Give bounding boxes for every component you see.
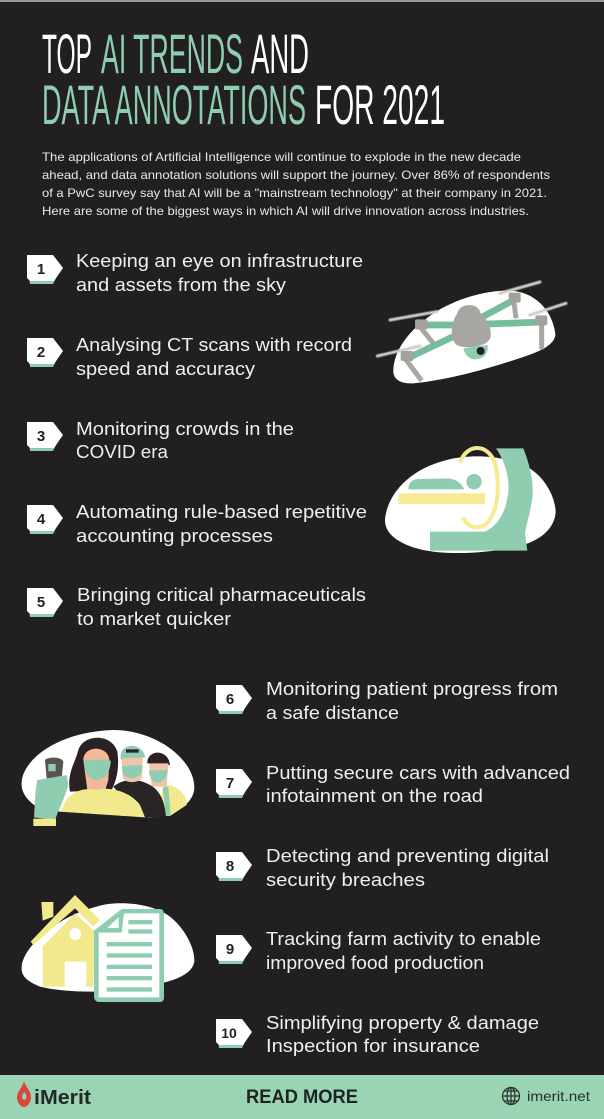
- item 10: 10: [221, 1025, 237, 1041]
- item 8: 8: [226, 858, 234, 875]
- item 6: Monitoring patient progress from: [266, 679, 558, 699]
- item 3: COVID era: [76, 442, 169, 462]
- item 8: security breaches: [266, 870, 425, 890]
- item 6: a safe distance: [266, 703, 399, 723]
- item 2: speed and accuracy: [76, 359, 255, 379]
- item 6: 6: [226, 691, 234, 708]
- title: TOP: [42, 22, 92, 85]
- item 4: 4: [37, 511, 46, 528]
- illustration: drone: [377, 282, 566, 383]
- item 4: accounting processes: [76, 526, 273, 546]
- item 9: improved food production: [266, 953, 484, 973]
- intro paragraph: [42, 151, 550, 218]
- item 2: 2: [37, 344, 45, 361]
- item 1: and assets from the sky: [76, 275, 286, 295]
- title: DATA ANNOTATIONS: [42, 73, 306, 136]
- item 1: Keeping an eye on infrastructure: [76, 251, 363, 271]
- item 8: [216, 846, 549, 890]
- read more link: READ MORE: [246, 1087, 358, 1108]
- intro paragraph: The applications of Artificial Intelligence will continue to explode in the new decade: [42, 151, 521, 164]
- item 6: [216, 679, 558, 723]
- intro paragraph: ahead, and data annotation solutions will support the journey. Over 86% of respondents: [42, 169, 550, 182]
- item 9: [216, 929, 541, 973]
- item 10: [216, 1013, 539, 1056]
- item 2: Analysing CT scans with record: [76, 335, 352, 355]
- website: imerit.net: [527, 1088, 590, 1104]
- footer bar: [0, 1075, 604, 1119]
- item 4: Automating rule-based repetitive: [76, 502, 367, 522]
- item 7: [216, 763, 570, 806]
- item 1: [27, 251, 363, 295]
- icon: globe: [502, 1088, 520, 1104]
- item 3: [27, 419, 294, 462]
- item 10: Inspection for insurance: [266, 1036, 480, 1056]
- item 1: 1: [37, 261, 45, 278]
- item 5: Bringing critical pharmaceuticals: [77, 585, 366, 605]
- intro paragraph: Here are some of the biggest ways in which AI will drive innovation across industries.: [42, 205, 529, 218]
- title: FOR 2021: [315, 73, 445, 136]
- item 9: 9: [226, 941, 234, 958]
- item 3: Monitoring crowds in the: [76, 419, 294, 439]
- item 7: 7: [226, 775, 234, 792]
- item 5: [27, 585, 366, 629]
- item 2: [27, 335, 352, 379]
- item 7: Putting secure cars with advanced: [266, 763, 570, 783]
- title: AND: [251, 22, 309, 85]
- intro paragraph: of a PwC survey say that AI will be a "mainstream technology" at their company in 2021.: [42, 187, 547, 200]
- logo text: iMerit: [34, 1087, 91, 1109]
- item 3: 3: [37, 428, 45, 445]
- illustration: house and document: [22, 895, 194, 1002]
- title: AI TRENDS: [101, 22, 243, 85]
- logo: iMerit flame: [17, 1081, 31, 1107]
- illustration: masked people: [22, 730, 194, 826]
- item 5: 5: [37, 594, 45, 611]
- item 7: infotainment on the road: [266, 786, 483, 806]
- illustration: CT scanner: [385, 448, 556, 553]
- item 4: [27, 502, 367, 546]
- item 8: Detecting and preventing digital: [266, 846, 549, 866]
- item 9: Tracking farm activity to enable: [266, 929, 541, 949]
- item 5: to market quicker: [77, 609, 231, 629]
- title: [42, 22, 445, 136]
- item 10: Simplifying property & damage: [266, 1013, 539, 1033]
